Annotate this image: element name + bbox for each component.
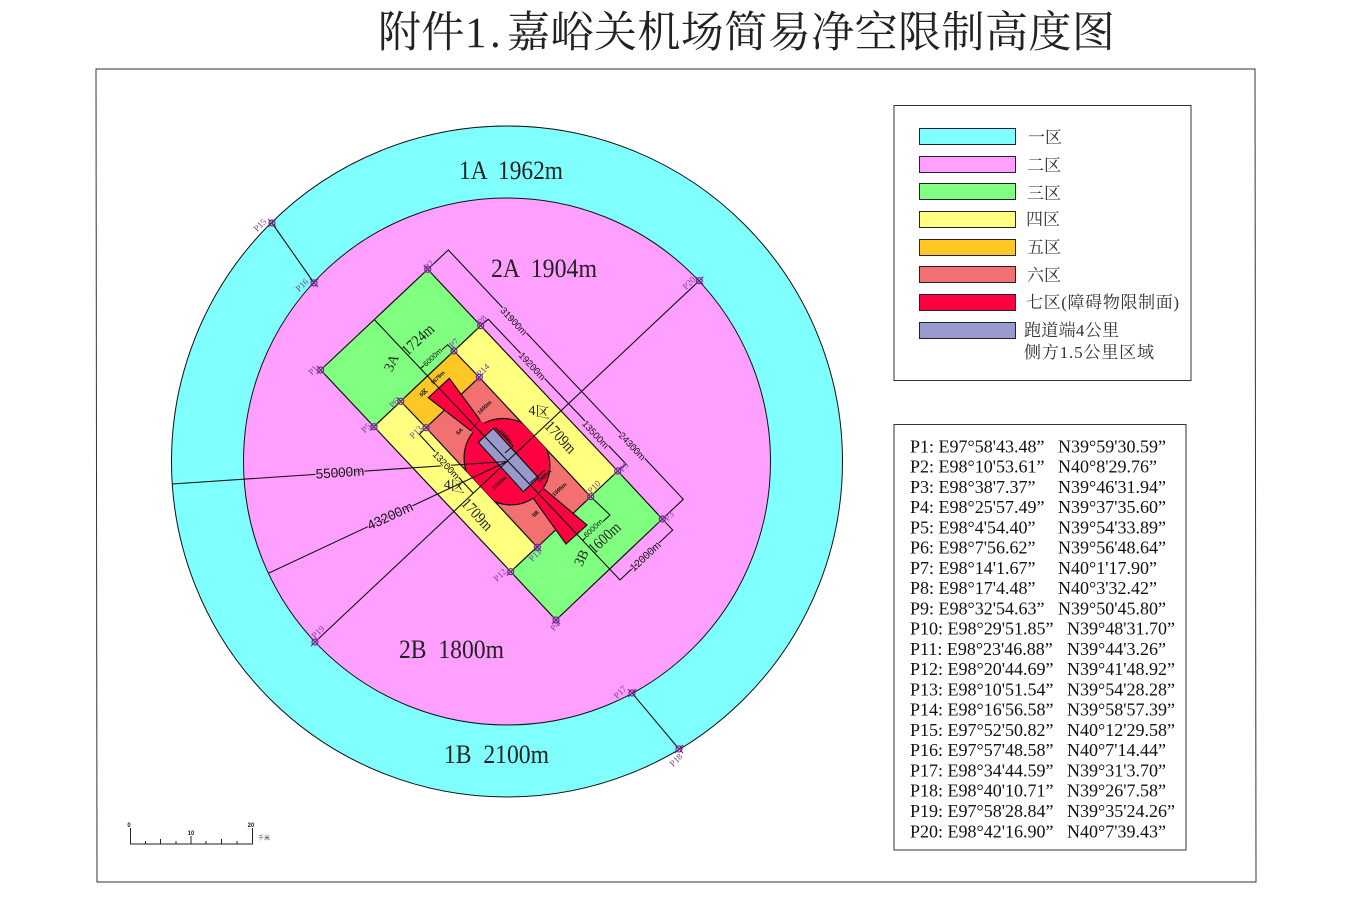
- zone 4 upper: 4区: [529, 402, 549, 422]
- legend: zone 7: [920, 293, 1179, 312]
- legend: zone 6: 六区: [1027, 266, 1061, 285]
- title: 1.: [465, 10, 501, 57]
- coordinate table: P5: E98°4'54.40”: [910, 517, 1035, 537]
- legend: zone 4: 四区: [1026, 210, 1060, 229]
- coordinate table: N39°37'35.60”: [1058, 497, 1166, 517]
- scale bar: 千米: [258, 834, 270, 842]
- coordinate table: P9: E98°32'54.63”: [910, 598, 1044, 618]
- coordinate table: N40°1'17.90”: [1058, 558, 1157, 578]
- runway strip: [478, 428, 538, 492]
- coordinate table: N39°31'3.70”: [1067, 760, 1166, 780]
- control points P1 to P20: P11: [527, 547, 543, 563]
- 31900m: 31900m: [498, 305, 529, 338]
- dimension lines: [172, 223, 699, 749]
- control points P1 to P20: P4: [548, 619, 562, 633]
- zone 3B green: [511, 471, 662, 620]
- coordinate table: P1: E97°58'43.48”: [910, 436, 1044, 456]
- label 3A: 3A: [382, 352, 403, 374]
- control points P1 to P20: P14: [475, 361, 492, 378]
- coordinate table: P15: E97°52'50.82”: [910, 720, 1053, 740]
- 6000m lower: 6000m: [582, 517, 605, 539]
- control points P1 to P20: P9: [617, 460, 631, 474]
- coordinate table: N40°3'32.42”: [1058, 578, 1157, 598]
- coordinate table: N40°12'29.58”: [1067, 720, 1175, 740]
- coordinate table: P19: E97°58'28.84”: [910, 801, 1053, 821]
- coordinate table: P8: E98°17'4.48”: [910, 578, 1035, 598]
- label 2A: 2A 1904m: [491, 254, 597, 283]
- control points P1 to P20: P10: [586, 478, 603, 495]
- 6000m upper: 6000m: [421, 346, 444, 368]
- control points P1 to P20: P3: [662, 509, 676, 523]
- label 2B: 2B 1800m: [399, 635, 504, 664]
- title: 嘉峪关机场简易净空限制高度图: [507, 9, 1115, 57]
- label 3B: 3B: [572, 548, 593, 569]
- coordinate table: P17: E98°34'44.59”: [910, 760, 1053, 780]
- height 1709m upper: 1709m: [541, 418, 579, 458]
- legend: zone 1: 一区: [1028, 128, 1062, 147]
- legend: runway area: 跑道端4公里: [1024, 321, 1119, 340]
- 12000m: 12000m: [628, 539, 664, 574]
- 13200m: 13200m: [430, 449, 461, 482]
- coordinate table: P10: E98°29'51.85”: [910, 619, 1053, 639]
- zone name labels: [382, 156, 625, 769]
- coordinate table: N39°59'30.59”: [1058, 436, 1166, 456]
- control points P1 to P20: [252, 216, 703, 768]
- control points P1 to P20: P20: [681, 274, 698, 291]
- legend: zone 4: [920, 210, 1060, 229]
- legend: zone 6: [920, 266, 1061, 285]
- map frame: [96, 69, 1256, 882]
- 55000m: 55000m: [315, 463, 365, 482]
- label 1A: 1A 1962m: [459, 156, 563, 185]
- zone 4 lower: 4区: [444, 477, 465, 497]
- legend: runway area: 侧方1.5公里区域: [1024, 343, 1154, 362]
- control points P1 to P20: P18: [668, 751, 685, 768]
- legend: zone 5: [920, 238, 1061, 257]
- coordinate table: P7: E98°14'1.67”: [910, 558, 1035, 578]
- small labels in inner zones: 5区: [417, 386, 430, 398]
- coordinate table: P16: E97°57'48.58”: [910, 740, 1053, 760]
- coordinate table: P12: E98°20'44.69”: [910, 659, 1053, 679]
- control points P1 to P20: P12: [492, 567, 508, 583]
- legend: zone 5: 五区: [1027, 238, 1061, 257]
- control points P1 to P20: P2: [422, 258, 436, 272]
- small labels in inner zones: 1679m: [430, 370, 447, 386]
- zone 6 salmon: [426, 377, 591, 547]
- control points P1 to P20: P1: [306, 363, 320, 377]
- coordinate table: N39°56'48.64”: [1058, 538, 1166, 558]
- zone 2: inner circle: [244, 198, 770, 725]
- scale bar: [127, 823, 270, 844]
- coordinate table: N39°46'31.94”: [1058, 477, 1166, 497]
- control points P1 to P20: P8: [475, 313, 489, 327]
- small labels in inner zones: 1595m: [492, 475, 508, 491]
- height 1709m lower: 1709m: [458, 495, 496, 535]
- title: 附件: [378, 10, 465, 57]
- coordinate table: P11: E98°23'46.88”: [910, 639, 1053, 659]
- control points P1 to P20: P19: [310, 623, 327, 640]
- coordinate table: [894, 424, 1186, 850]
- coordinate table: N40°8'29.76”: [1058, 457, 1157, 477]
- dimension labels: [315, 305, 664, 574]
- coordinate table: N39°54'28.28”: [1067, 679, 1175, 699]
- clearance map: [172, 126, 842, 797]
- coordinate table: N39°26'7.58”: [1067, 781, 1166, 801]
- zone 3A green: [321, 269, 481, 427]
- coordinate table: N39°44'3.26”: [1067, 639, 1166, 659]
- control points P1 to P20: P17: [612, 683, 629, 700]
- zone 4 yellow: [374, 326, 618, 572]
- coordinate table: P14: E98°16'56.58”: [910, 700, 1053, 720]
- zone 1: outer ring: [172, 126, 842, 797]
- coordinate table: N40°7'39.43”: [1067, 821, 1166, 841]
- small labels in inner zones: 1595m: [552, 482, 568, 498]
- legend: zone 3: 三区: [1027, 184, 1061, 203]
- 13500m: 13500m: [579, 419, 611, 451]
- coordinate table: N39°41'48.92”: [1067, 659, 1175, 679]
- legend: zone 3: [920, 184, 1061, 203]
- legend: zone 2: 二区: [1027, 156, 1061, 175]
- coordinate table: P20: E98°42'16.90”: [910, 821, 1053, 841]
- coordinate table: N39°48'31.70”: [1067, 619, 1175, 639]
- 19200m: 19200m: [516, 350, 547, 383]
- coordinate table: N39°50'45.80”: [1058, 598, 1166, 618]
- small labels in inner zones: [417, 370, 568, 519]
- coordinate table: P18: E98°40'10.71”: [910, 781, 1053, 801]
- control points P1 to P20: P15: [252, 216, 269, 233]
- height 1724m: 1724m: [399, 321, 438, 359]
- control points P1 to P20: P7: [447, 336, 461, 350]
- legend panel: [894, 106, 1191, 380]
- 43200m: 43200m: [365, 499, 415, 533]
- label 1B: 1B 2100m: [444, 740, 549, 769]
- 24300m: 24300m: [616, 430, 647, 463]
- zone 7 red obstacle limit surface: [428, 378, 587, 544]
- scale bar: 0: [127, 823, 131, 829]
- coordinate table: N39°58'57.39”: [1067, 700, 1175, 720]
- zone 5 orange: [401, 351, 479, 428]
- scale bar: 10: [188, 831, 195, 837]
- coordinate table: P2: E98°10'53.61”: [910, 457, 1044, 477]
- legend: zone 1: [920, 128, 1062, 147]
- legend: runway area: [920, 321, 1154, 362]
- coordinate table: P3: E98°38'7.37”: [910, 477, 1035, 497]
- height 1600m: 1600m: [585, 519, 625, 557]
- coordinate table: N39°54'33.89”: [1058, 517, 1166, 537]
- small labels in inner zones: 1595m: [537, 469, 553, 485]
- legend: zone 7: 七区(障碍物限制面): [1026, 293, 1179, 312]
- small labels in inner zones: 6A: [455, 427, 465, 437]
- control points P1 to P20: P5: [359, 421, 373, 435]
- small labels in inner zones: 6B: [531, 510, 541, 519]
- control points P1 to P20: P16: [294, 276, 311, 293]
- coordinate table: N39°35'24.26”: [1067, 801, 1175, 821]
- coordinate table: P4: E98°25'57.49”: [910, 497, 1044, 517]
- coordinate table: P6: E98°7'56.62”: [910, 538, 1035, 558]
- scale bar: 20: [248, 823, 255, 829]
- legend: zone 2: [920, 156, 1061, 175]
- coordinate table: N40°7'14.44”: [1067, 740, 1166, 760]
- control points P1 to P20: P6: [387, 396, 401, 410]
- small labels in inner zones: 1600m: [477, 400, 493, 416]
- small labels in inner zones: 1500m: [497, 428, 513, 445]
- coordinate table: P13: E98°10'51.54”: [910, 679, 1053, 699]
- control points P1 to P20: P13: [408, 423, 425, 440]
